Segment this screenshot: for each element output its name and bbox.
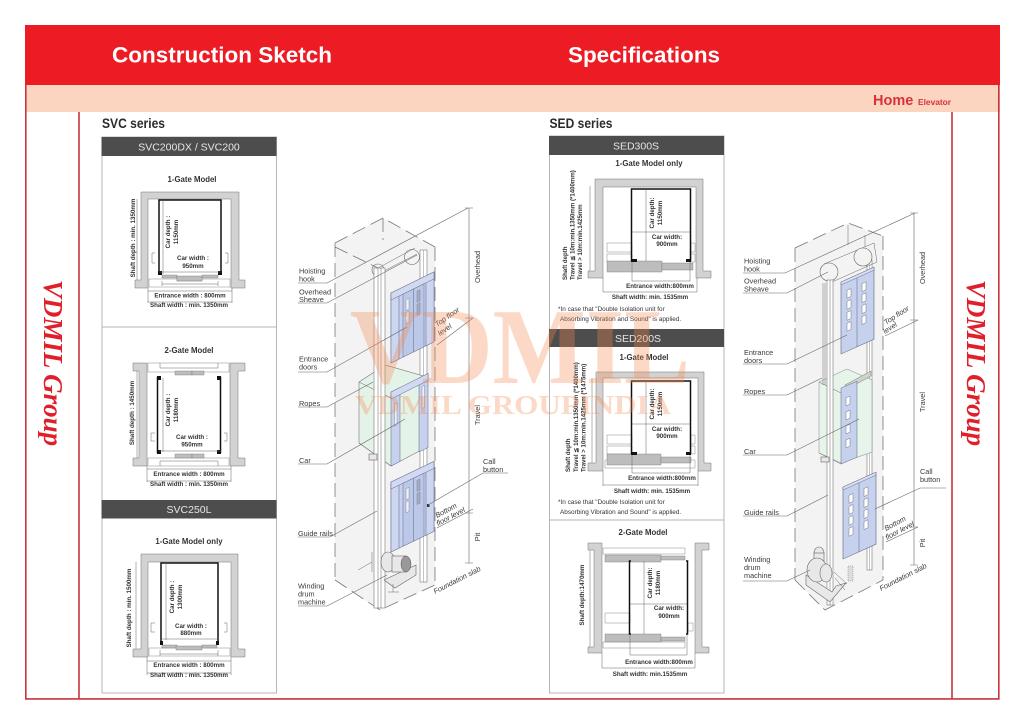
plan: SVC250L 1-gate: Car width : xyxy=(175,623,207,630)
label: Car xyxy=(298,419,405,465)
label: Winding drum machine xyxy=(298,575,387,606)
label: Top floor level: Top floor xyxy=(882,304,911,327)
heading: SVC series: SVC series xyxy=(102,116,165,131)
header: SED200S: SED200S xyxy=(615,333,661,345)
right guide rail xyxy=(867,260,872,570)
label: Pit: Pit xyxy=(473,533,482,541)
plan: SVC200 1-gate: Car width : xyxy=(177,255,209,262)
plan: SED200S 2-gate: 2-Gate Model xyxy=(619,528,667,537)
plan: SED200S 1-gate: *In case that "Double Isolation unit for xyxy=(558,499,666,506)
plan: SVC200 2-gate: Car depth : xyxy=(165,394,172,426)
label: Call button: button xyxy=(920,475,940,484)
label: Entrance doors xyxy=(298,327,407,372)
label: Hoisting hook: Hoisting xyxy=(299,266,325,276)
left guide rail xyxy=(369,268,385,608)
overhead sheave xyxy=(372,248,420,276)
plan: SVC200 2-gate: Entrance width : 800mm xyxy=(153,471,225,478)
plan: SVC200 1-gate: Shaft width : min. 1350mm xyxy=(150,302,229,309)
heading: Specifications: Specifications xyxy=(568,42,720,68)
plan: SED300S: Car width: xyxy=(652,234,682,241)
header: SVC200DX / SVC200 xyxy=(102,137,276,156)
label: Winding drum machine: machine xyxy=(744,571,772,580)
label: Car: Car xyxy=(744,447,756,456)
label: Ropes xyxy=(743,378,822,396)
plan: SED300S: 900mm xyxy=(656,241,678,248)
plan: SVC250L 1-gate xyxy=(126,537,245,679)
label: Ropes: Ropes xyxy=(744,387,765,396)
plan: SED200S 1-gate: Travel > 10m:min.1425mm (*1475mm) xyxy=(580,364,588,472)
overhead sheave xyxy=(820,225,877,282)
label: Winding drum machine: Winding xyxy=(298,582,324,590)
plan: SVC200 1-gate: Entrance width : 800mm xyxy=(154,292,226,300)
plan: SVC250L 1-gate: 880mm xyxy=(180,630,202,637)
plan: SED200S 1-gate xyxy=(558,353,711,516)
label: Guide rails xyxy=(743,495,828,517)
dimension: travel line xyxy=(910,213,918,565)
label: Top floor level: Top floor xyxy=(433,305,462,329)
label: Call button xyxy=(428,457,508,505)
label: Overhead Sheave: Overhead xyxy=(299,288,331,296)
label: Overhead: Overhead xyxy=(473,251,482,283)
breadcrumb band xyxy=(25,85,1000,112)
plan: SED200S 1-gate: Shaft width: min. 1535mm xyxy=(614,488,691,495)
plan: SED200S 2-gate: Shaft depth:1470mm xyxy=(579,564,586,625)
label: Winding drum machine: machine xyxy=(298,598,326,606)
label: Entrance doors: doors xyxy=(744,356,763,365)
label: Winding drum machine: Winding xyxy=(744,555,770,564)
plan: SVC200 2-gate: 2-Gate Model xyxy=(165,346,213,355)
plan: SED300S: Travel ≦ 10m:min.1350mm (*1400mm) xyxy=(570,170,576,280)
side label right: VDMIL Group xyxy=(961,280,991,446)
label: Travel: Travel xyxy=(918,392,927,412)
plan: SED200S 2-gate: Entrance width:800mm xyxy=(625,659,693,666)
plan: SED200S 2-gate: 900mm xyxy=(658,613,680,620)
label: Overhead Sheave xyxy=(743,272,828,294)
plan: SED200S 2-gate xyxy=(579,528,709,678)
label: Guide rails xyxy=(298,511,377,538)
car xyxy=(819,369,872,464)
plan: SVC200 2-gate xyxy=(129,346,245,488)
left guide rail xyxy=(821,280,833,605)
header: SED200S xyxy=(549,329,724,347)
plan: SED300S: 1-Gate Model only xyxy=(615,159,683,168)
plan: SED200S 1-gate: Car width: xyxy=(652,426,682,433)
plan: SED300S: Car depth: xyxy=(649,198,656,228)
plan: SVC250L 1-gate: Car depth : xyxy=(169,581,176,613)
label: Overhead Sheave xyxy=(298,255,417,304)
header: SVC250L: SVC250L xyxy=(167,504,212,516)
plan: SVC200 2-gate: Shaft width : min. 1350mm xyxy=(150,481,229,488)
call button xyxy=(427,504,430,507)
header: SVC200DX / SVC200: SVC200DX / SVC200 xyxy=(138,142,240,154)
isometric sketch: SVC xyxy=(298,208,508,610)
breadcrumb band: Home xyxy=(873,93,913,109)
label: Hoisting hook xyxy=(298,208,468,284)
label: Call button: Call xyxy=(483,457,496,466)
panel: SED series xyxy=(549,136,724,693)
heading: SED series: SED series xyxy=(550,116,612,131)
plan: SVC200 1-gate: Shaft depth : min. 1350mm xyxy=(130,198,137,277)
label: Entrance doors: doors xyxy=(299,362,318,372)
label: Hoisting hook: hook xyxy=(299,274,315,284)
dimension: travel line xyxy=(465,208,473,563)
door: top floor xyxy=(391,272,434,363)
label: Hoisting hook xyxy=(743,213,915,274)
label: Car xyxy=(743,419,859,456)
plan: SVC200 1-gate: 950mm xyxy=(182,263,204,270)
plan: SED200S 2-gate: 1180mm xyxy=(655,570,662,595)
plan: SED200S 1-gate: Car depth: xyxy=(649,389,656,419)
plan: SED200S 1-gate: 1-Gate Model xyxy=(620,353,668,362)
plan: SVC250L 1-gate: Entrance width : 800mm xyxy=(153,662,225,669)
spring buffer xyxy=(848,566,853,581)
label: Bottom floor level: Bottom xyxy=(883,514,907,533)
plan: SED300S: *In case that "Double Isolation unit for xyxy=(558,306,666,313)
heading: Construction Sketch: Construction Sketch xyxy=(112,42,332,68)
header: SED300S: SED300S xyxy=(613,140,659,152)
plan: SVC200 1-gate: 1150mm xyxy=(173,219,180,244)
label: Bottom floor level: Bottom xyxy=(434,501,458,520)
label: Overhead Sheave: Sheave xyxy=(744,284,769,294)
label: Top floor level xyxy=(881,304,918,336)
label: Top floor level: level xyxy=(436,321,454,338)
label: Overhead Sheave: Sheave xyxy=(299,295,324,304)
plan: SED200S 1-gate: Travel ≦ 10m:min.1350mm (*1400mm) xyxy=(573,362,580,472)
label: Entrance doors: Entrance xyxy=(299,354,328,364)
label: Pit: Pit xyxy=(918,539,927,547)
label: Hoisting hook: hook xyxy=(744,264,760,274)
label: Winding drum machine xyxy=(743,555,810,581)
plan: SVC250L 1-gate: Shaft width : min. 1350mm xyxy=(150,672,229,679)
label: Ropes: Ropes xyxy=(299,399,320,408)
plan: SVC200 2-gate: 950mm xyxy=(181,442,203,448)
winding drum machine xyxy=(806,547,847,602)
plan: SVC200 2-gate: 1180mm xyxy=(173,397,180,422)
label: Guide rails: Guide rails xyxy=(298,529,333,538)
plan: SED300S xyxy=(558,159,711,323)
label: Foundation slab: Foundation slab xyxy=(878,561,928,593)
plan: SVC250L 1-gate: 1-Gate Model only xyxy=(155,537,223,546)
car xyxy=(359,365,427,466)
label: Call button xyxy=(875,467,946,509)
label: Foundation slab: Foundation slab xyxy=(432,564,482,596)
header: SVC250L xyxy=(102,500,276,518)
label: Winding drum machine: drum xyxy=(298,590,315,598)
label: Top floor level: level xyxy=(881,320,899,336)
watermark: VDMIL GROUPINDIA xyxy=(355,390,672,420)
plan: SED200S 2-gate: Shaft width: min.1535mm xyxy=(613,671,688,678)
winding drum machine xyxy=(358,552,416,592)
label: Winding drum machine: drum xyxy=(744,563,761,572)
plan: SVC250L 1-gate: Shaft depth : min. 1500mm xyxy=(126,568,133,647)
plan: SVC200 1-gate xyxy=(130,175,245,309)
plan: SED300S: 1150mm xyxy=(657,200,664,225)
label: Guide rails: Guide rails xyxy=(744,508,779,517)
plan: SED300S: Shaft width: min. 1535mm xyxy=(612,294,689,301)
door: top floor xyxy=(841,267,874,354)
label: Overhead: Overhead xyxy=(918,252,927,284)
plan: SED200S 2-gate: Car depth: xyxy=(647,568,654,598)
plan: SVC250L 1-gate: 1300mm xyxy=(177,584,184,609)
label: Bottom floor level: floor level xyxy=(435,505,467,528)
plan: SED200S 1-gate: Absorbing Vibration and Sound" is applied. xyxy=(560,509,681,516)
right guide rail xyxy=(420,250,427,582)
label: Entrance doors xyxy=(743,335,847,365)
plan: SED200S 1-gate: Shaft depth xyxy=(565,438,572,472)
plan: SED300S: Travel > 10m:min.1425mm xyxy=(577,204,584,280)
label: Overhead Sheave: Overhead xyxy=(744,276,776,286)
label: Bottom floor level: floor level xyxy=(884,519,916,542)
label: Hoisting hook: Hoisting xyxy=(744,256,770,266)
label: Ropes xyxy=(298,382,373,408)
breadcrumb band: Elevator xyxy=(918,97,952,107)
side label left: VDMIL Group xyxy=(38,280,68,446)
label: Car: Car xyxy=(299,456,311,465)
plan: SED300S: Shaft depth xyxy=(562,246,569,280)
plan: SED300S: Entrance width:800mm xyxy=(626,283,694,290)
plan: SED200S 1-gate: 900mm xyxy=(656,433,678,440)
label: Entrance doors: Entrance xyxy=(744,348,773,357)
door: bottom floor xyxy=(391,461,434,552)
plan: SVC200 1-gate: Car depth : xyxy=(165,216,172,248)
panel: SVC series xyxy=(102,137,276,693)
plan: SVC200 2-gate: Car width : xyxy=(176,434,208,441)
plan: SED200S 1-gate: Entrance width:800mm xyxy=(628,475,696,482)
label: Travel: Travel xyxy=(473,405,482,425)
isometric sketch: SED xyxy=(743,213,946,610)
door: car xyxy=(391,374,428,466)
header: SED300S xyxy=(549,136,724,155)
label: Call button: Call xyxy=(920,467,933,476)
header band xyxy=(25,25,1000,85)
plan: SVC200 2-gate: Shaft depth : 1450mm xyxy=(129,380,136,445)
plan: SED300S: Absorbing Vibration and Sound" is applied. xyxy=(560,316,681,323)
door: bottom floor xyxy=(843,472,876,559)
watermark: VDMIL xyxy=(350,288,690,407)
plan: SVC200 1-gate: 1-Gate Model xyxy=(168,175,216,184)
label: Call button: button xyxy=(483,465,503,474)
label: Bottom floor level xyxy=(434,501,473,528)
plan: SED200S 2-gate: Car width: xyxy=(654,605,684,612)
plan: SED200S 1-gate: 1150mm xyxy=(657,391,664,416)
label: Top floor level xyxy=(433,305,473,345)
door: car xyxy=(841,381,857,464)
